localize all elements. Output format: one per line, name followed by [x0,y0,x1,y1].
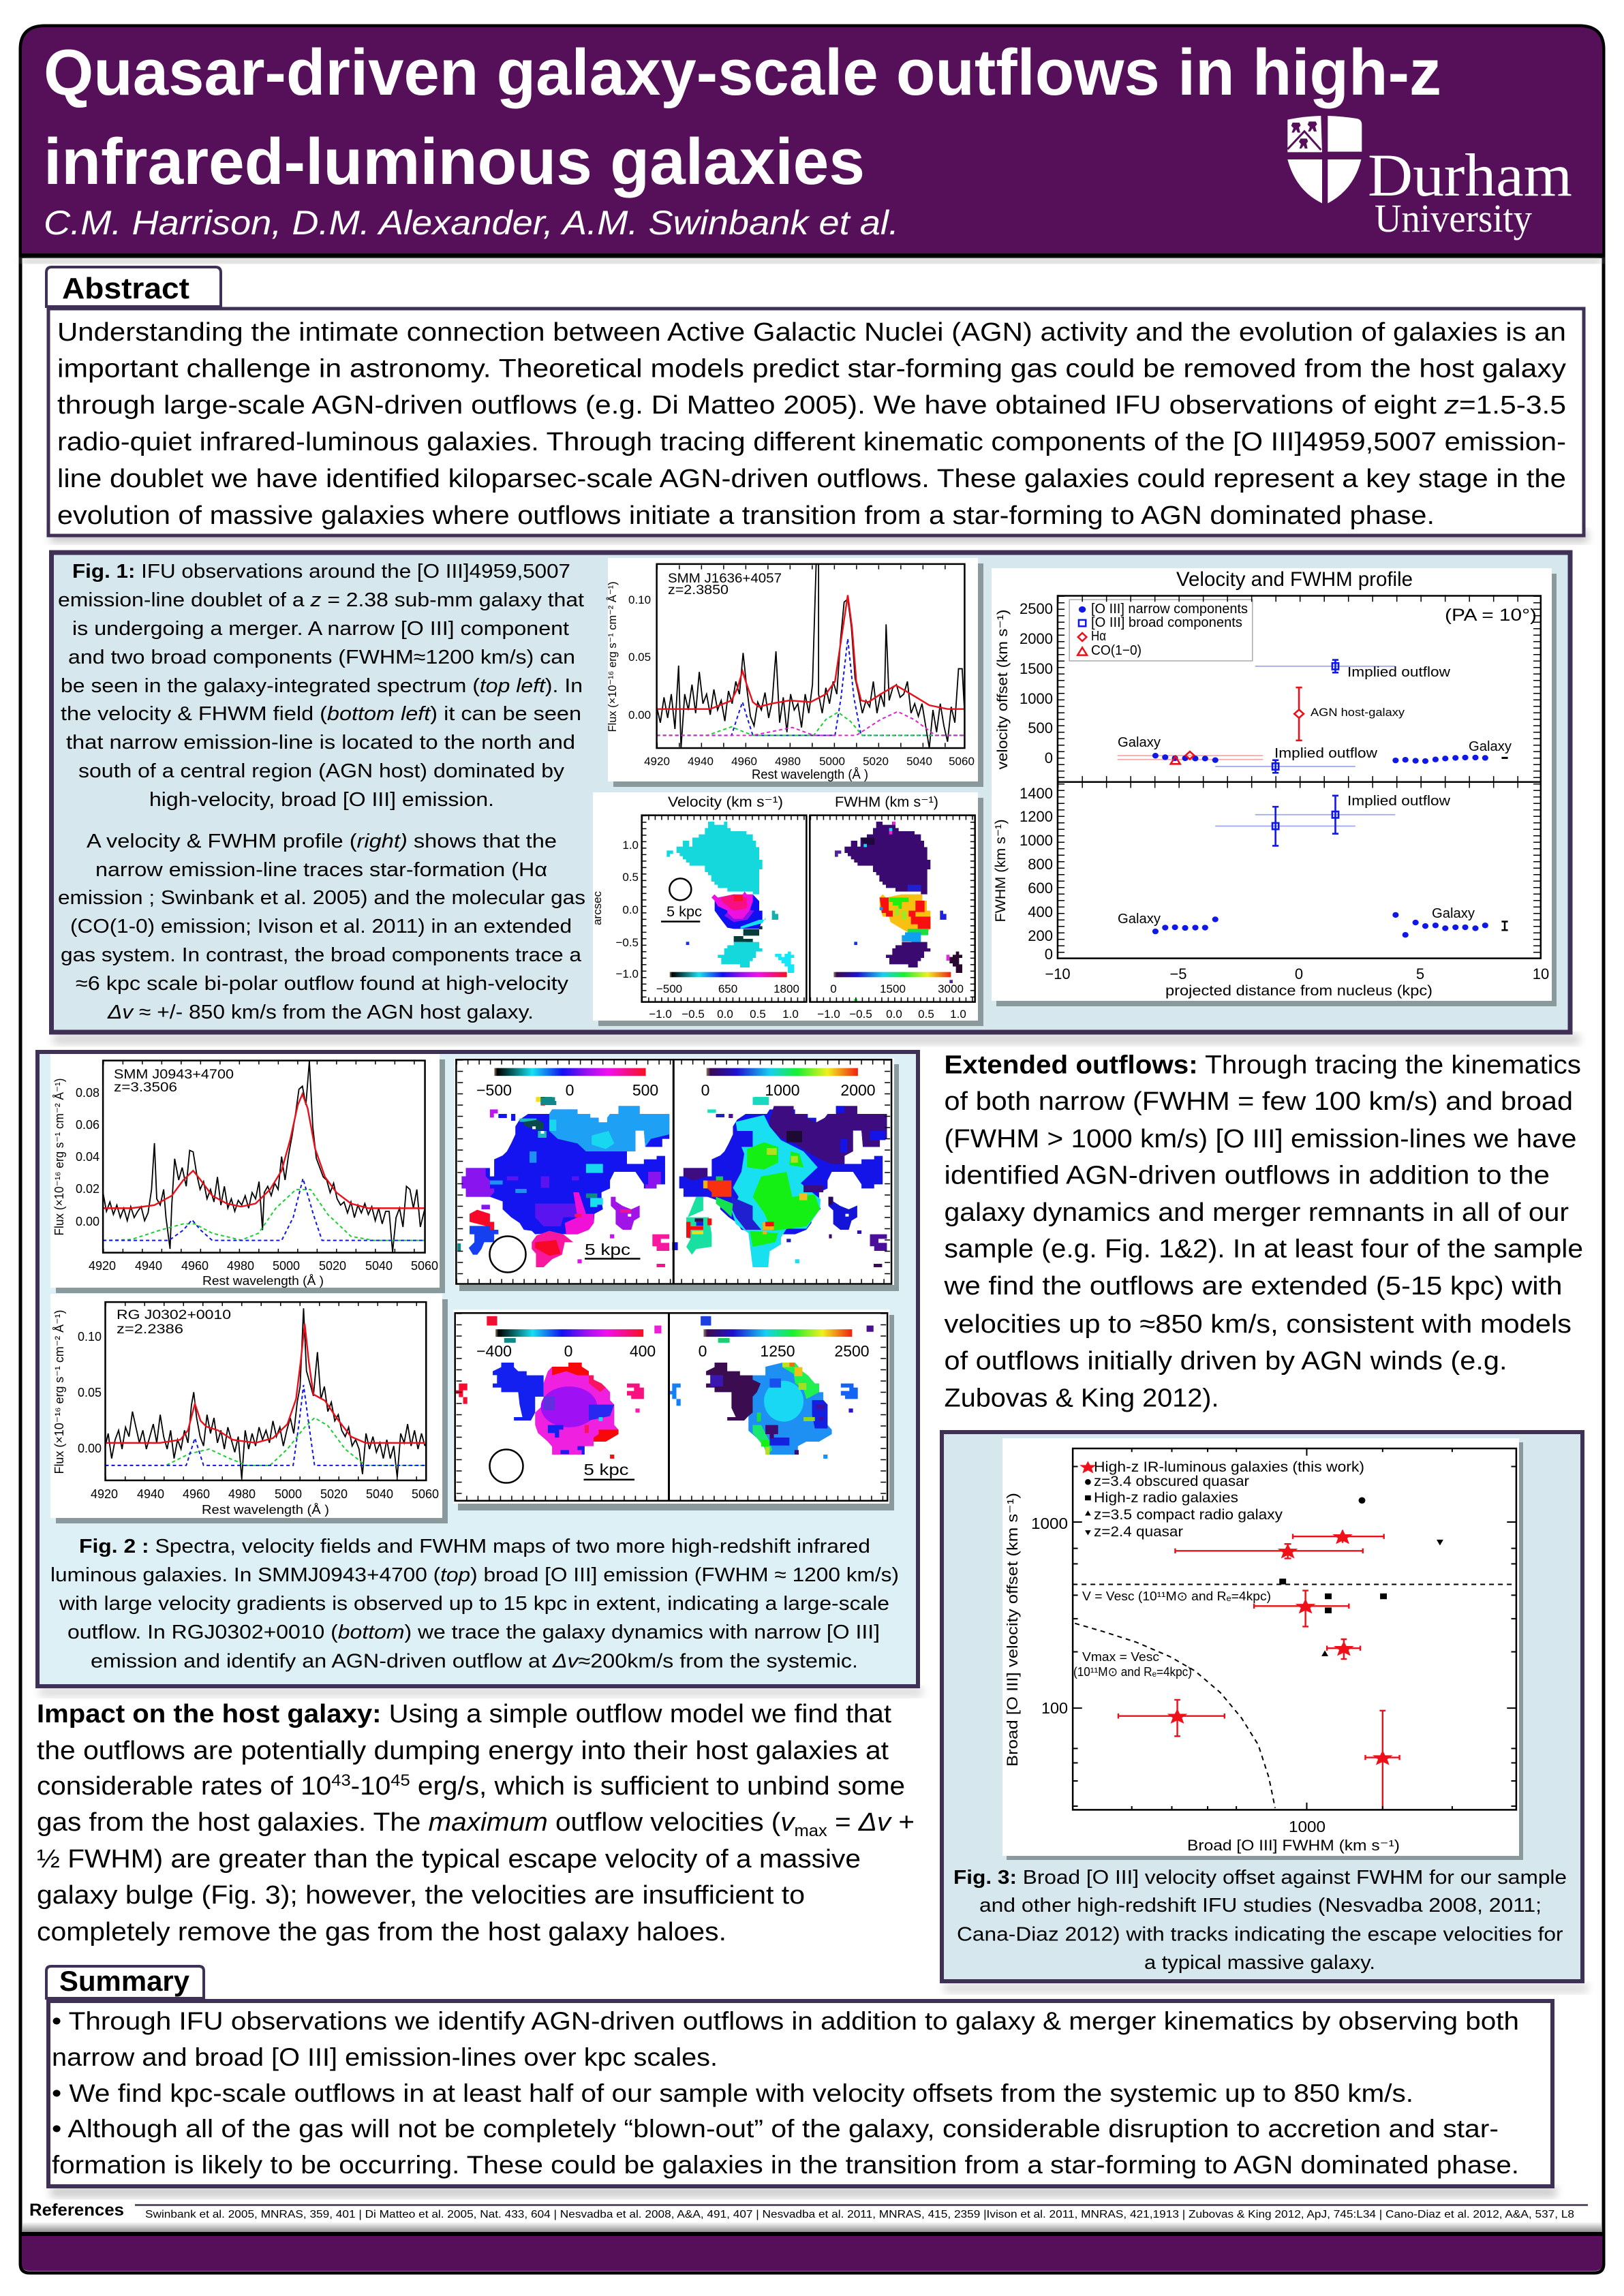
references: References [29,2201,124,2220]
chart: velocity and FWHM profile: 1000 [1020,690,1053,707]
Fig. 1 caption: ≈6 kpc scale bi-polar outflow found at high-velocity [76,973,569,995]
chart: velocity offset vs FWHM: Vmax = Vesc [1082,1650,1159,1664]
comparison sample markers [1085,1479,1443,1656]
Fig. 1 caption: high-velocity, broad [O III] emission. [149,789,494,811]
chart: velocity offset vs FWHM: z=3.4 obscured quasar [1094,1474,1249,1489]
chart: RG J0302 velocity and FWHM maps: 2500 [834,1342,870,1360]
chart: velocity offset vs FWHM: 1000 [1031,1515,1068,1532]
chart: SMM J0943+4700 spectrum: 4940 [135,1259,162,1273]
chart: RG J0302+0010 spectrum: 5060 [412,1487,439,1501]
abstract text [57,318,1566,530]
chart: SMM J0943 velocity and FWHM maps: 2000 [840,1081,876,1099]
chart: SMM J0943+4700 spectrum: 4960 [181,1259,209,1273]
chart: SMM J1636+4057 spectrum: 0.10 [628,593,651,606]
chart: SMM J0943+4700 spectrum: 5020 [319,1259,346,1273]
chart: RG J0302+0010 spectrum: 5020 [320,1487,348,1501]
chart: velocity and FWHM profile: 800 [1028,856,1053,873]
Fig. 1 caption: be seen in the galaxy-integrated spectrum ( top left ). In [61,675,583,697]
colorbars [494,1068,858,1076]
summary text: narrow and broad [O III] emission-lines over kpc scales. [52,2043,718,2071]
text block: Impact on the host galaxy: = [827,1808,859,1837]
chart: Fig. 1 velocity and FWHM maps: −1.0 [649,1008,672,1021]
chart: RG J0302+0010 spectrum: 4920 [91,1487,118,1501]
chart: velocity and FWHM profile: 1500 [1020,660,1053,677]
chart: Fig. 1 velocity and FWHM maps: 0.0 [886,1008,902,1021]
panel: Fig. 1 [52,553,1580,1044]
Fig. 1 caption: emission-line doublet of a z = 2.38 sub-mm galaxy that [58,589,584,611]
Fig. 1 caption: and two broad components (FWHM≈1200 km/s) can [68,647,575,668]
chart: Fig. 1 velocity and FWHM maps: 1.0 [950,1008,966,1021]
chart: Fig. 1 velocity and FWHM maps: 1.0 [782,1008,799,1021]
chart: Fig. 1 velocity and FWHM maps: 1.0 [622,839,639,852]
chart: Fig. 1 velocity and FWHM maps: Velocity (km s⁻¹) [668,794,783,810]
chart: Fig. 1 velocity and FWHM maps: 0.0 [622,903,639,916]
chart: SMM J1636+4057 spectrum: 5040 [906,755,932,768]
legend box [1069,600,1253,661]
Fig. 1 caption: A velocity & FWHM profile ( right) shows that the [87,831,557,852]
text block: Extended outflows: Zubovas & King 2012). [945,1384,1219,1413]
chart: velocity and FWHM profile: −10 [1045,965,1071,982]
abstract heading tab [46,267,221,307]
chart: RG J0302+0010 spectrum: RG J0302+0010 [117,1308,231,1322]
chart: RG J0302+0010 spectrum: 4940 [137,1487,164,1501]
chart: SMM J1636+4057 spectrum: 4960 [731,755,757,768]
chart: velocity and FWHM profile: −5 [1169,965,1187,982]
text block: Impact on the host galaxy: the outflows are potentially dumping energy into their host galaxies at [37,1737,889,1765]
chart: SMM J1636+4057 spectrum: 4980 [775,755,801,768]
chart: SMM J0943+4700 spectrum: 0.08 [76,1086,99,1100]
abstract heading tab: Abstract [62,272,189,305]
chart: velocity and FWHM profile: Implied outflow [1274,746,1378,761]
header band [20,27,1604,263]
references [29,2201,1588,2220]
text block: Impact on the host galaxy: gas from the host galaxies. The maximum outflow velocities ( v [37,1808,793,1837]
chart: RG J0302+0010 spectrum: Flux (×10⁻¹⁶ erg s⁻¹ cm⁻² Å⁻¹) [52,1309,66,1474]
chart: velocity and FWHM profile: Hα [1091,629,1106,644]
text block: Impact on the host galaxy: 43 [331,1771,351,1790]
abstract text: through large-scale AGN-driven outflows (e.g. Di Matteo 2005). We have obtained IFU observations of eight z=1.5-3.5 [57,391,1566,420]
chart: velocity and FWHM profile: [O III] broad components [1091,615,1242,630]
chart: velocity and FWHM profile: Galaxy [1118,735,1161,750]
chart: Fig. 1 velocity and FWHM maps: −1.0 [817,1008,840,1021]
lions [1291,121,1317,149]
chart: Fig. 1 velocity and FWHM maps: FWHM (km s⁻¹) [835,794,938,810]
text block: Impact on the host galaxy: 45 [390,1771,410,1790]
Fig. 2 caption: Fig. 2 : Spectra, velocity fields and FWHM maps of two more high-redshift infrared [79,1536,870,1557]
chart: SMM J0943 velocity and FWHM maps: 0 [566,1081,574,1099]
chart: velocity offset vs FWHM: Broad [O III] velocity offset (km s⁻¹) [1004,1493,1021,1767]
velocity map pixels [457,1097,669,1267]
chart: velocity and FWHM profile: velocity offset (km s⁻¹) [995,609,1011,770]
chart: velocity offset vs FWHM: 1000 [1289,1818,1326,1835]
chart: velocity and FWHM profile: 1200 [1020,808,1053,825]
chart: Fig. 1 velocity and FWHM maps: 0.0 [717,1008,733,1021]
chart: Fig. 1 velocity and FWHM maps [591,792,983,1026]
chart: RG J0302+0010 spectrum: z=2.2386 [117,1322,183,1337]
chart: velocity and FWHM profile: 10 [1533,965,1549,982]
chart: RG J0302 velocity and FWHM maps: 5 kpc [583,1461,628,1478]
panel: Fig. 2 [37,1052,923,1696]
logo: Durham University: University [1375,196,1532,241]
chart: SMM J0943+4700 spectrum: SMM J0943+4700 [114,1068,234,1082]
chart: velocity and FWHM profile: (PA = 10°) [1445,606,1537,625]
chart: SMM J0943+4700 spectrum [50,1054,445,1293]
chart: SMM J0943 velocity and FWHM maps: 5 kpc [585,1241,630,1258]
chart: SMM J1636+4057 spectrum: Rest wavelength (Å ) [752,768,868,782]
chart: SMM J0943+4700 spectrum: 4920 [89,1259,116,1273]
Fig. 2 caption [50,1536,899,1672]
chart: RG J0302 velocity and FWHM maps: 1250 [760,1342,795,1360]
chart: Fig. 1 velocity and FWHM maps: 3000 [938,982,964,995]
chart: RG J0302+0010 spectrum: 0.05 [78,1386,102,1399]
FWHM map pixels [835,822,962,1002]
summary text: • Although all of the gas will not be completely “blown-out” of the galaxy, considerable disruption to accretion and star- [52,2115,1499,2143]
text block: Extended outflows: we find the outflows are extended (5-15 kpc) with [943,1272,1562,1301]
chart: velocity and FWHM profile: FWHM (km s⁻¹) [993,819,1009,922]
colorbars [495,1329,852,1337]
chart: RG J0302+0010 spectrum: 4960 [183,1487,210,1501]
summary text [52,2007,1519,2179]
abstract text: important challenge in astronomy. Theoretical models predict star-forming gas could be removed from the host galaxy [57,355,1566,384]
chart: SMM J0943 velocity and FWHM maps: −500 [476,1081,512,1099]
chart: SMM J0943+4700 spectrum: 0.06 [76,1118,99,1132]
summary text: • We find kpc-scale outflows in at least half of our sample with velocity offsets from the systemic up to 850 km/s. [52,2079,1413,2107]
Fig. 1 caption: south of a central region (AGN host) dominated by [78,760,565,782]
chart: velocity and FWHM profile: 1400 [1020,785,1053,802]
chart: velocity offset vs FWHM: z=2.4 quasar [1094,1524,1183,1540]
chart: velocity and FWHM profile: Galaxy [1432,906,1475,921]
Fig. 3 caption: a typical massive galaxy. [1144,1952,1375,1974]
references: Swinbank et al. 2005, MNRAS, 359, 401 | Di Matteo et al. 2005, Nat. 433, 604 | Nesvadba et al. 2008, A&A, 491, 407 | Nesvadba et al. 2011, MNRAS, 415, 2359 |Ivison et al. 2011, MNRAS, 421,1913 | Zubovas & King 2012, ApJ, 745:L34 | Cano-Diaz et al. 2012, A&A, 537, L8 [145,2209,1574,2220]
chart: velocity offset vs FWHM: High-z radio galaxies [1094,1490,1238,1506]
Fig. 3 caption: Fig. 3: Broad [O III] velocity offset against FWHM for our sample [953,1867,1567,1889]
chart: Fig. 1 velocity and FWHM maps: −0.5 [681,1008,705,1021]
abstract text: evolution of massive galaxies where outflows initiate a transition from a star-forming to AGN dominated phase. [57,501,1435,530]
Fig. 1 caption: the velocity & FHWM field ( bottom left ) it can be seen [61,703,581,725]
velocity map pixels [455,1363,644,1459]
abstract text: radio-quiet infrared-luminous galaxies. Through tracing different kinematic components of the [O III]4959,5007 emission- [57,428,1566,456]
Fig. 1 caption [58,561,585,1023]
chart: Fig. 1 velocity and FWHM maps: 1500 [880,982,906,995]
logo: Durham University [1287,116,1572,241]
text block: Extended outflows: of both narrow (FWHM = few 100 km/s) and broad [945,1087,1573,1116]
chart: SMM J1636+4057 spectrum: Flux (×10⁻¹⁶ erg s⁻¹ cm⁻² Å⁻¹) [606,582,619,732]
Fig. 2 caption: luminous galaxies. In SMMJ0943+4700 ( top) broad [O III] emission (FWHM ≈ 1200 km/s) [50,1564,899,1586]
text block: Impact on the host galaxy: max [794,1822,827,1840]
chart: velocity and FWHM profile: 400 [1028,903,1053,920]
chart: velocity and FWHM profile: 0 [1295,965,1303,982]
abstract text: Understanding the intimate connection between Active Galactic Nuclei (AGN) activity and the evolution of galaxies is an [57,318,1566,347]
Fig. 1 caption: (CO(1-0) emission; Ivison et al. 2011) in an extended [70,916,572,937]
chart: Fig. 1 velocity and FWHM maps: −0.5 [615,936,639,949]
summary text: formation is likely to be occurring. These could be galaxies in the transition from a star-forming to AGN dominated phase. [52,2151,1519,2179]
chart: velocity and FWHM profile: 2000 [1020,630,1053,647]
chart: RG J0302 velocity and FWHM maps: 0 [699,1342,707,1360]
title [44,36,1441,198]
chart: SMM J0943+4700 spectrum: 0.00 [76,1215,99,1228]
Fig. 2 caption: outflow. In RGJ0302+0010 ( bottom ) we trace the galaxy dynamics with narrow [O III] [67,1622,880,1643]
chart: velocity and FWHM profile: Galaxy [1118,912,1161,927]
velocity map pixels [667,822,794,973]
chart: velocity and FWHM profile: [O III] narrow components [1091,602,1248,617]
chart: SMM J0943+4700 spectrum: z=3.3506 [114,1081,177,1095]
text block: Impact on the host galaxy: -10 [351,1772,390,1801]
chart: SMM J1636+4057 spectrum: 5000 [819,755,845,768]
chart: SMM J0943+4700 spectrum: 5060 [411,1259,438,1273]
top-panel data points [1152,753,1488,764]
Fig. 3 caption: and other high-redshift IFU studies (Nesvadba 2008, 2011; [979,1895,1542,1917]
chart: Fig. 1 velocity and FWHM maps: 0.5 [622,871,639,884]
summary text: • Through IFU observations we identify AGN-driven outflows in addition to galaxy & merger kinematics by observing both [52,2007,1519,2035]
chart: RG J0302+0010 spectrum: 0.10 [78,1330,102,1344]
chart: SMM J0943+4700 spectrum: 4980 [227,1259,254,1273]
chart: SMM J1636+4057 spectrum: 0.05 [628,651,651,664]
chart: velocity and FWHM profile: 200 [1028,927,1053,944]
text block: Extended outflows: identified AGN-driven outflows in addition to the [945,1161,1550,1190]
chart: velocity offset vs FWHM: z=3.5 compact radio galaxy [1094,1507,1283,1523]
Fig. 3 caption [953,1867,1567,1974]
text block: Extended outflows: (FWHM > 1000 km/s) [O III] emission-lines we have [945,1125,1577,1153]
text block: Extended outflows: sample (e.g. Fig. 1&2). In at least four of the sample [945,1235,1583,1263]
panel: Fig. 3 [942,1432,1588,1993]
chart: Fig. 1 velocity and FWHM maps: 0.5 [750,1008,766,1021]
text block: Impact on the host galaxy: Δv + [859,1808,913,1837]
abstract panel [48,309,1588,542]
chart: velocity and FWHM profile: 0 [1045,749,1053,766]
chart: velocity and FWHM profile: 500 [1028,719,1053,736]
chart: velocity offset vs FWHM: V = Vesc (10¹¹M⊙ and Rₑ=4kpc) [1082,1589,1271,1603]
chart: Fig. 1 velocity and FWHM maps: 650 [718,982,737,995]
abstract text: line doublet we have identified kiloparsec-scale AGN-driven outflows. These galaxies could represent a key stage in the [57,465,1566,493]
chart: RG J0302+0010 spectrum: Rest wavelength (Å ) [202,1503,329,1517]
Fig. 1 caption: Fig. 1: IFU observations around the [O III]4959,5007 [72,561,570,583]
text block: Impact on the host galaxy: erg/s, which is sufficient to unbind some [410,1772,905,1801]
chart: velocity and FWHM profile: 5 [1416,965,1424,982]
Fig. 1 caption: gas system. In contrast, the broad components trace a [61,944,582,966]
chart: SMM J0943+4700 spectrum: 5040 [365,1259,393,1273]
Fig. 1 caption: that narrow emission-line is located to the north and [66,732,575,754]
chart: velocity and FWHM profile: Velocity and FWHM profile [1176,568,1413,591]
text block: Extended outflows: velocities up to ≈850 km/s, consistent with models [945,1310,1572,1339]
chart: RG J0302+0010 spectrum: 4980 [228,1487,256,1501]
chart: velocity offset vs FWHM: 100 [1041,1699,1068,1717]
text block: Impact on the host galaxy: galaxy bulge (Fig. 3); however, the velocities are insufficient to [37,1881,805,1910]
chart: velocity and FWHM profile: projected distance from nucleus (kpc) [1165,983,1433,999]
chart: velocity and FWHM profile: Implied outflow [1347,794,1451,809]
Fig. 1 caption: Δv ≈ +/- 850 km/s from the AGN host galaxy. [107,1002,534,1023]
summary panel [48,2001,1557,2197]
summary heading tab: Summary [59,1965,190,1997]
shield quarters [1287,116,1362,203]
text block: Extended outflows [943,1051,1583,1413]
colorbars [670,972,951,977]
text block: Extended outflows: of outflows initially driven by AGN winds (e.g. [945,1347,1507,1376]
chart: RG J0302 velocity and FWHM maps [453,1309,894,1510]
chart: RG J0302 velocity and FWHM maps: 0 [564,1342,572,1360]
authors: C.M. Harrison, D.M. Alexander, A.M. Swinbank et al. [44,204,899,242]
chart: velocity and FWHM profile: 600 [1028,880,1053,897]
chart: RG J0302+0010 spectrum [50,1294,448,1523]
chart: SMM J1636+4057 spectrum: 4940 [688,755,714,768]
chart: velocity and FWHM profile: 2500 [1020,600,1053,617]
chart: SMM J1636+4057 spectrum: 0.00 [628,709,651,722]
chart: SMM J0943+4700 spectrum: Rest wavelength (Å ) [202,1274,324,1288]
text block: Impact on the host galaxy: considerable rates of 10 [37,1772,313,1801]
text block: Impact on the host galaxy [37,1700,915,1946]
chart: Fig. 1 velocity and FWHM maps: arcsec [591,890,604,925]
chart: SMM J0943+4700 spectrum: Flux (×10⁻¹⁶ erg s⁻¹ cm⁻² Å⁻¹) [52,1078,66,1236]
chart: SMM J1636+4057 spectrum: 5060 [949,755,975,768]
chart: velocity offset vs FWHM: High-z IR-luminous galaxies (this work) [1094,1459,1364,1475]
chart: SMM J1636+4057 spectrum: 4920 [644,755,670,768]
chart: velocity offset vs FWHM: (10¹¹M⊙ and Rₑ=4kpc) [1073,1665,1192,1679]
text block: Extended outflows: galaxy dynamics and merger remnants in all of our [945,1198,1569,1227]
bottom-panel data points [1152,912,1488,937]
Fig. 3 caption: Cana-Diaz 2012) with tracks indicating the escape velocities for [957,1924,1563,1946]
chart: velocity and FWHM profile: Galaxy [1469,739,1512,754]
chart: Fig. 1 velocity and FWHM maps: −1.0 [615,967,639,980]
footer band [20,2222,1604,2271]
Fig. 1 caption: is undergoing a merger. A narrow [O III] component [72,618,569,640]
Fig. 2 caption: with large velocity gradients is observed up to 15 kpc in extent, indicating a large-scale [59,1593,889,1615]
chart: velocity and FWHM profile: AGN host-galaxy [1311,706,1405,719]
text block: Impact on the host galaxy: ½ FWHM) are greater than the typical escape velocity of a massive [37,1845,861,1874]
chart: RG J0302+0010 spectrum: 5040 [366,1487,393,1501]
chart: velocity and FWHM profile: Implied outflow [1347,665,1451,680]
text block: Extended outflows: Extended outflows: Through tracing the kinematics [945,1051,1581,1079]
chart: SMM J0943 velocity and FWHM maps: 1000 [765,1081,800,1099]
chart: RG J0302 velocity and FWHM maps: −400 [476,1342,512,1360]
chart: RG J0302+0010 spectrum: 0.00 [78,1442,102,1455]
chart: RG J0302+0010 spectrum: 5000 [275,1487,302,1501]
text block: Impact on the host galaxy: Impact on the host galaxy: Using a simple outflow model we find that [37,1700,891,1728]
chart: SMM J0943+4700 spectrum: 0.02 [76,1182,99,1196]
chart: velocity offset vs FWHM [1002,1438,1523,1860]
chart: Fig. 1 velocity and FWHM maps: −500 [656,982,682,995]
chart: SMM J0943 velocity and FWHM maps: 0 [701,1081,709,1099]
chart: Fig. 1 velocity and FWHM maps: 0.5 [918,1008,934,1021]
chart: Fig. 1 velocity and FWHM maps: 5 kpc [667,904,702,920]
chart: Fig. 1 velocity and FWHM maps: −0.5 [849,1008,872,1021]
chart: SMM J1636+4057 spectrum [606,558,983,787]
chart: SMM J0943 velocity and FWHM maps: 500 [632,1081,658,1099]
FWHM map pixels [672,1097,887,1267]
chart: SMM J0943+4700 spectrum: 0.04 [76,1150,99,1164]
chart: RG J0302 velocity and FWHM maps: 400 [630,1342,656,1360]
title: Quasar-driven galaxy-scale outflows in high-z [44,36,1441,109]
Fig. 1 caption: narrow emission-line traces star-formation (Hα [95,859,547,881]
chart: velocity and FWHM profile: 0 [1045,946,1053,963]
Fig. 2 caption: emission and identify an AGN-driven outflow at Δv≈200km/s from the systemic. [91,1650,858,1672]
this-work red points [1118,1530,1400,1810]
title: infrared-luminous galaxies [44,125,865,198]
chart: SMM J0943+4700 spectrum: 5000 [273,1259,300,1273]
chart: velocity and FWHM profile: CO(1−0) [1091,643,1142,658]
chart: Fig. 1 velocity and FWHM maps: 1800 [773,982,799,995]
chart: velocity and FWHM profile [992,568,1557,1006]
chart: Fig. 1 velocity and FWHM maps: 0 [830,982,837,995]
logo: Durham University: Durham [1368,142,1572,209]
text block: Impact on the host galaxy: completely remove the gas from the host galaxy haloes. [37,1918,726,1946]
chart: SMM J1636+4057 spectrum: z=2.3850 [668,583,729,598]
chart: velocity and FWHM profile: 1000 [1020,832,1053,849]
Fig. 1 caption: emission ; Swinbank et al. 2005) and the molecular gas [58,887,585,909]
FWHM map pixels [668,1363,858,1459]
chart: SMM J1636+4057 spectrum: SMM J1636+4057 [668,572,782,586]
chart: velocity offset vs FWHM: Broad [O III] FWHM (km s⁻¹) [1187,1837,1400,1854]
chart: SMM J0943 velocity and FWHM maps [455,1058,899,1291]
chart: SMM J1636+4057 spectrum: 5020 [863,755,889,768]
